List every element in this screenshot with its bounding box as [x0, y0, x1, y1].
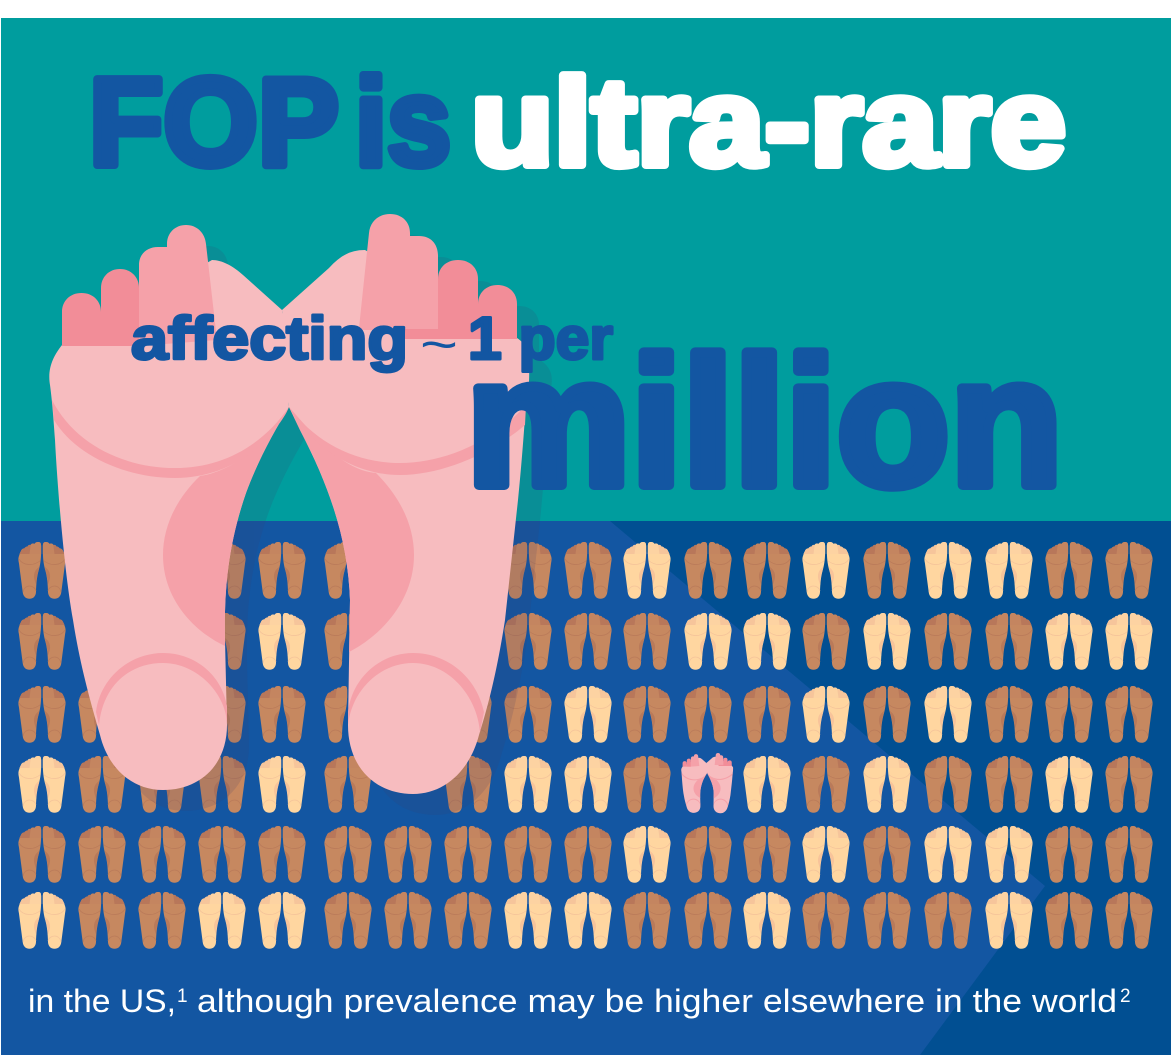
subheading: affecting ~1 per: [131, 305, 613, 374]
row 1 of feet: [18, 542, 1153, 599]
icon: large pink feet: [49, 214, 530, 794]
row 3 of feet: [18, 686, 1153, 743]
row 2 of feet: [18, 613, 1153, 670]
row 4 of feet: [18, 756, 1153, 813]
footnote line: although prevalence may be higher elsewhere in the world: [197, 983, 1117, 1019]
subheading: affecting ~1 per: affecting: [131, 305, 408, 372]
diagonal dark shadow: [610, 521, 1171, 1055]
big feet shadow: [71, 235, 552, 815]
grid of small feet: [18, 542, 1153, 949]
subheading: affecting ~1 per: 1 per: [468, 305, 613, 372]
footnote line: in the US,: [28, 983, 176, 1019]
title words: FOP is: is: [355, 54, 451, 192]
subheading: affecting ~1 per: ~: [420, 316, 458, 374]
panel: blue lower background: [1, 521, 1171, 1055]
title words: FOP is: FOP: [89, 54, 339, 192]
footnote line: 2: [1120, 986, 1131, 1007]
row 5 of feet: [18, 826, 1153, 883]
title: [89, 54, 1066, 192]
title words: ultra-rare: ultra-rare: [471, 54, 1066, 192]
icon: small pink feet, the one-in-a-million: [681, 753, 733, 813]
heading: million: million: [466, 319, 1063, 524]
row 6 of feet: [18, 892, 1153, 949]
footnote line: 1: [177, 986, 188, 1007]
panel: teal upper background: [1, 18, 1171, 522]
